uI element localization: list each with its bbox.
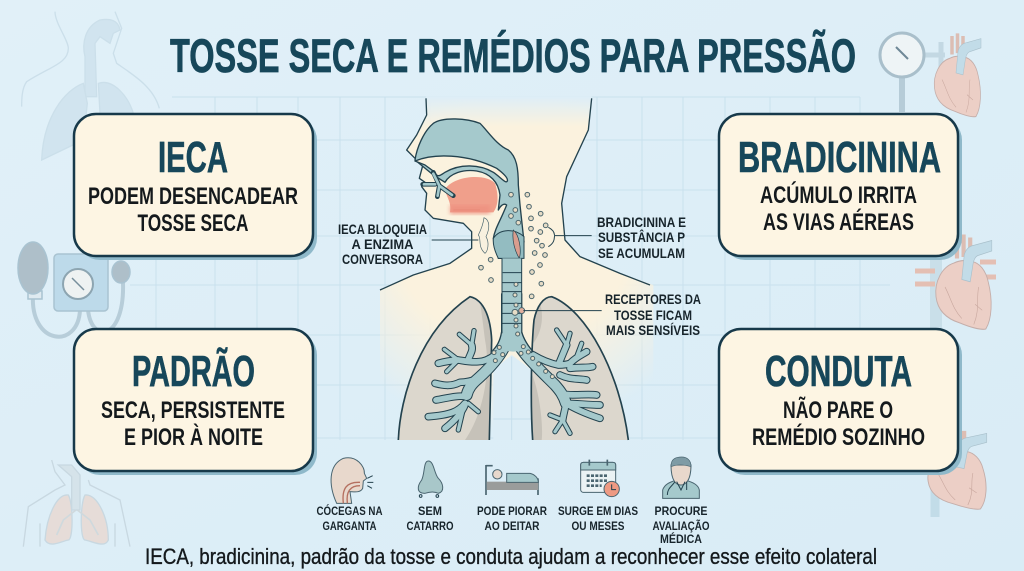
decoration: faded lungs xyxy=(23,460,130,547)
icon labels: AO DEITAR xyxy=(484,519,540,533)
callout: IECA bloqueia xyxy=(338,221,427,267)
icon labels: CÓCEGAS NA xyxy=(316,503,383,518)
decoration: blood pressure device xyxy=(18,242,130,337)
lip fork xyxy=(423,172,453,197)
callout: bradicinina: BRADICININA E xyxy=(597,214,686,230)
head airway xyxy=(415,119,524,258)
panel: BRADICININA: BRADICININA xyxy=(738,133,941,182)
callout: bradicinina: SUBSTÂNCIA P xyxy=(598,228,685,245)
panel: PADRÃO xyxy=(74,329,317,475)
trachea xyxy=(502,258,522,333)
decoration: gauge and hearts xyxy=(880,33,996,517)
icon labels: GARGANTA xyxy=(322,519,377,533)
panel: IECA: TOSSE SECA xyxy=(138,210,248,237)
panel: BRADICININA: AS VIAS AÉREAS xyxy=(763,208,914,236)
panel: CONDUTA: CONDUTA xyxy=(765,347,912,396)
icon: bed xyxy=(486,465,538,495)
callout: IECA bloqueia: CONVERSORA xyxy=(342,251,423,267)
lungs and bronchial tree xyxy=(398,293,628,440)
icon: throat xyxy=(331,458,373,503)
callout leaders xyxy=(432,227,602,311)
icon: nose xyxy=(418,461,443,497)
panel: PADRÃO: SECA, PERSISTENTE xyxy=(101,397,285,424)
callout: IECA bloqueia: A ENZIMA xyxy=(352,236,414,252)
larynx xyxy=(493,231,524,258)
panel: CONDUTA xyxy=(719,329,962,475)
callout: receptores xyxy=(605,291,701,338)
panel: BRADICININA: ACÚMULO IRRITA xyxy=(760,181,917,209)
icon labels: OU MESES xyxy=(572,519,624,533)
callout: IECA bloqueia: IECA BLOQUEIA xyxy=(338,221,427,237)
panel: IECA: PODEM DESENCADEAR xyxy=(88,183,298,210)
panel: CONDUTA: NÃO PARE O xyxy=(783,396,893,424)
caption: IECA, bradicinina, padrão da tosse e conduta ajudam a reconhecer esse efeito colateral xyxy=(145,544,877,569)
callout: receptores: MAIS SENSÍVEIS xyxy=(606,322,700,338)
throat irritation xyxy=(478,218,489,253)
icon: calendar xyxy=(581,460,619,497)
callout: bradicinina xyxy=(597,214,686,261)
tongue xyxy=(445,177,498,212)
icon labels: PROCURE xyxy=(654,504,708,518)
decoration: faded respiratory figure xyxy=(22,12,159,160)
icon labels: SURGE EM DIAS xyxy=(558,504,638,518)
panel: PADRÃO: PADRÃO xyxy=(132,346,255,396)
callout: receptores: RECEPTORES DA xyxy=(605,291,701,307)
hard palate xyxy=(415,156,507,182)
icon labels: AVALIAÇÃO xyxy=(652,518,710,533)
panel: IECA xyxy=(74,114,317,260)
body silhouette xyxy=(380,97,653,443)
icon labels: CATARRO xyxy=(406,519,454,533)
icon labels: PODE PIORAR xyxy=(477,504,547,518)
icon labels: MÉDICA xyxy=(660,531,702,546)
icon: doctor xyxy=(663,457,699,498)
anatomy diagram xyxy=(380,97,653,443)
callout: receptores: TOSSE FICAM xyxy=(614,307,692,323)
panel: PADRÃO: E PIOR À NOITE xyxy=(124,423,263,451)
callout: bradicinina: SE ACUMULAM xyxy=(598,245,685,261)
panel: CONDUTA: REMÉDIO SOZINHO xyxy=(752,423,925,451)
icon row xyxy=(331,457,699,503)
icon labels: SEM xyxy=(418,504,442,518)
panel: IECA: IECA xyxy=(158,133,228,182)
panel: BRADICININA xyxy=(719,114,962,260)
background grid xyxy=(130,97,890,440)
icon labels xyxy=(316,503,710,546)
particles xyxy=(479,192,554,379)
